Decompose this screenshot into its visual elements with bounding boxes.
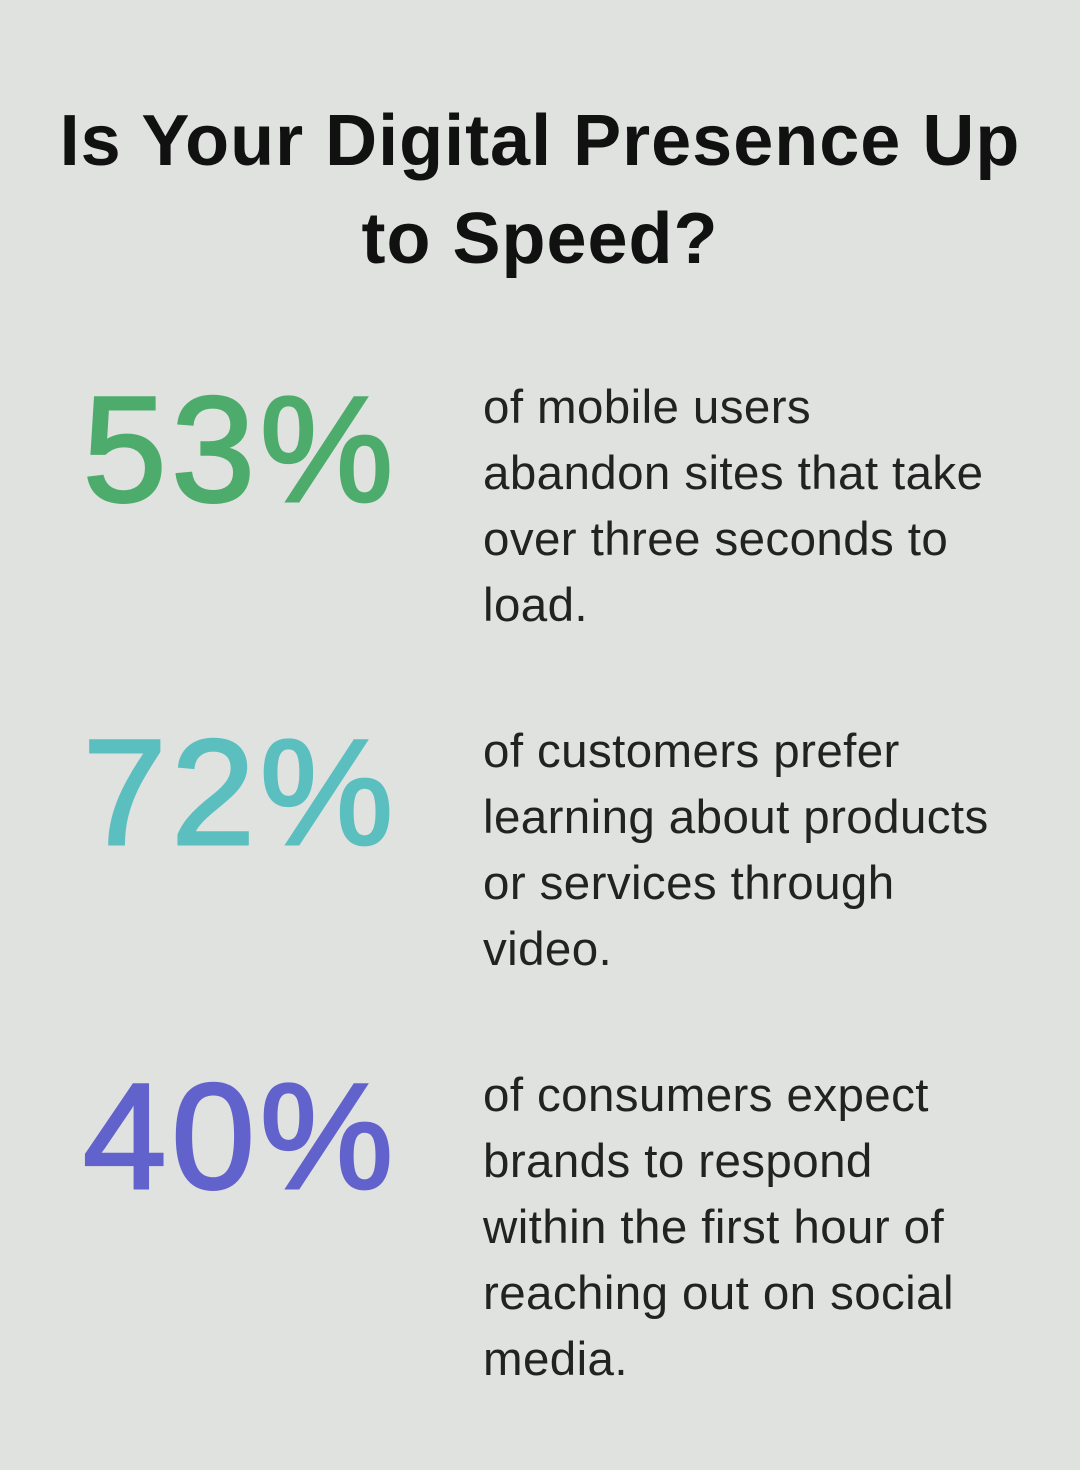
title: Is Your Digital Presence Up xyxy=(60,101,1020,181)
stat 3 text: reaching out on social xyxy=(483,1267,954,1320)
stat 3 text xyxy=(483,1069,954,1386)
title: to Speed? xyxy=(361,199,718,279)
stat 1 text: over three seconds to xyxy=(483,513,948,566)
stat 2 text: video. xyxy=(483,923,612,976)
stat 1 text: abandon sites that take xyxy=(483,447,983,500)
stat 1 number: 53% xyxy=(83,365,398,533)
stat 2 text xyxy=(483,725,989,976)
stat 1 text: load. xyxy=(483,579,588,632)
stat 3 text: brands to respond xyxy=(483,1135,873,1188)
stat 1 text xyxy=(483,381,983,632)
stat 2 number: 72% xyxy=(83,708,398,876)
stat 3 text: of consumers expect xyxy=(483,1069,929,1122)
stat 2 text: of customers prefer xyxy=(483,725,900,778)
stat 3 text: media. xyxy=(483,1333,628,1386)
stat 3 text: within the first hour of xyxy=(483,1201,944,1254)
stat 2 text: learning about products xyxy=(483,791,989,844)
stat 3 number: 40% xyxy=(83,1052,398,1220)
stat 2 text: or services through xyxy=(483,857,895,910)
title xyxy=(60,101,1020,279)
stat 1 text: of mobile users xyxy=(483,381,811,434)
